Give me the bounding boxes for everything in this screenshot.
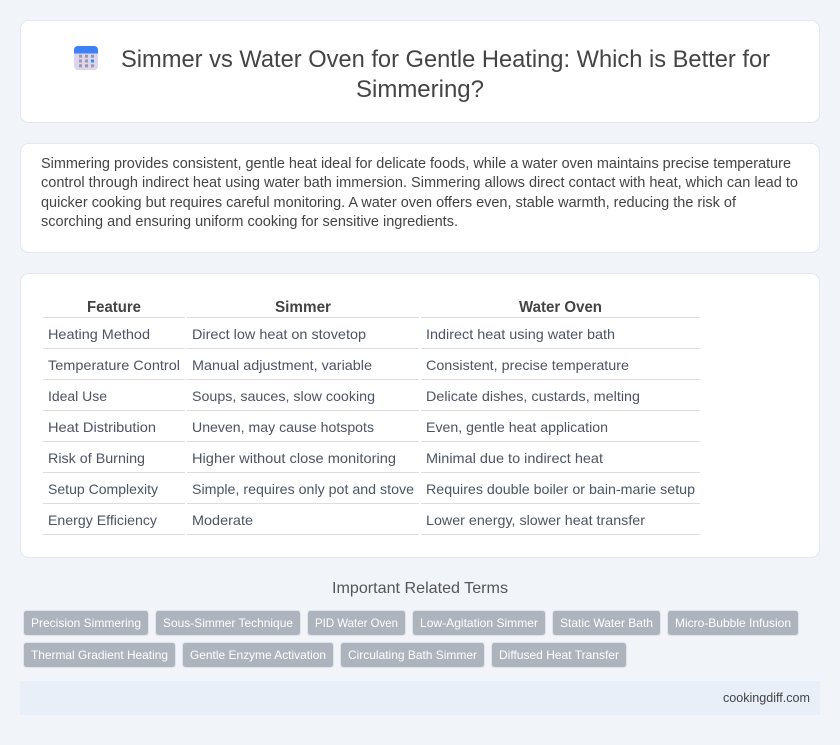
footer source: cookingdiff.com	[723, 691, 810, 705]
table row: ideal use	[48, 388, 640, 404]
title: Simmering?	[356, 76, 484, 103]
tag: Static Water Bath	[560, 616, 653, 630]
footer bar	[20, 681, 820, 715]
intro text: scorching and ensuring uniform cooking for sensitive ingredients.	[41, 214, 458, 230]
tag: Micro-Bubble Infusion	[675, 616, 791, 630]
table row: temperature control	[48, 357, 629, 373]
tag: Sous-Simmer Technique	[163, 616, 293, 630]
tag	[156, 610, 300, 636]
table row: setup complexity: Simple, requires only pot and stove	[192, 481, 414, 497]
title	[121, 46, 770, 103]
table row: heating method	[48, 326, 615, 342]
tag	[668, 610, 798, 636]
panel: comparison table	[20, 274, 820, 558]
table row: risk of burning	[48, 450, 603, 466]
table row: heating method: Direct low heat on stovetop	[192, 326, 366, 342]
related terms heading: Important Related Terms	[332, 580, 508, 597]
table row: temperature control: Temperature Control	[48, 357, 180, 373]
table row: energy efficiency: Lower energy, slower heat transfer	[426, 512, 645, 528]
table header: Water Oven	[519, 299, 602, 316]
table row: temperature control: Manual adjustment, variable	[192, 357, 372, 373]
tag	[492, 642, 626, 668]
table row: risk of burning: Minimal due to indirect heat	[426, 450, 603, 466]
tag: Low-Agitation Simmer	[420, 616, 538, 630]
intro text: quicker cooking but requires careful monitoring. A water oven offers even, stable warmth, reducing the risk of	[41, 195, 737, 211]
tag	[340, 642, 484, 668]
tag: Precision Simmering	[31, 616, 141, 630]
related terms tags	[24, 610, 798, 668]
table row: setup complexity	[48, 481, 695, 497]
tag	[24, 610, 148, 636]
tag	[308, 610, 406, 636]
table rules	[43, 318, 700, 534]
table row: heating method: Indirect heat using water bath	[426, 326, 615, 342]
intro text: Simmering provides consistent, gentle heat ideal for delicate foods, while a water oven maintains precise temperature	[41, 156, 791, 172]
tag	[24, 642, 176, 668]
panel: title header	[20, 20, 820, 122]
tag: Thermal Gradient Heating	[31, 648, 168, 662]
panel: introduction	[20, 144, 820, 252]
intro text: control through indirect heat using water bath immersion. Simmering allows direct contact with heat, which can lead to	[41, 175, 798, 191]
table row: risk of burning: Risk of Burning	[48, 450, 145, 466]
table row: heat distribution	[48, 419, 608, 435]
table row: energy efficiency: Moderate	[192, 512, 253, 528]
table row: ideal use: Delicate dishes, custards, melting	[426, 388, 640, 404]
tag	[182, 642, 334, 668]
tag	[552, 610, 660, 636]
table row: ideal use: Soups, sauces, slow cooking	[192, 388, 375, 404]
table row: ideal use: Ideal Use	[48, 388, 107, 404]
table row: energy efficiency	[48, 512, 645, 528]
table row: heat distribution: Even, gentle heat application	[426, 419, 608, 435]
tag: PID Water Oven	[315, 616, 398, 630]
table row: setup complexity: Requires double boiler or bain-marie setup	[426, 481, 695, 497]
tag: Gentle Enzyme Activation	[190, 648, 326, 662]
tag: Circulating Bath Simmer	[348, 648, 477, 662]
tag	[412, 610, 546, 636]
table row: risk of burning: Higher without close monitoring	[192, 450, 396, 466]
table row: setup complexity: Setup Complexity	[48, 481, 158, 497]
table header: Simmer	[275, 299, 331, 316]
table row: heating method: Heating Method	[48, 326, 150, 342]
table row: heat distribution: Heat Distribution	[48, 419, 156, 435]
table row: heat distribution: Uneven, may cause hotspots	[192, 419, 374, 435]
intro text	[41, 156, 798, 230]
title: Simmer vs Water Oven for Gentle Heating: Which is Better for	[121, 46, 770, 73]
tag: Diffused Heat Transfer	[499, 648, 619, 662]
table row: temperature control: Consistent, precise temperature	[426, 357, 629, 373]
table header	[87, 299, 602, 316]
table header: Feature	[87, 299, 141, 316]
icon: calendar	[74, 46, 98, 70]
table row: energy efficiency: Energy Efficiency	[48, 512, 157, 528]
